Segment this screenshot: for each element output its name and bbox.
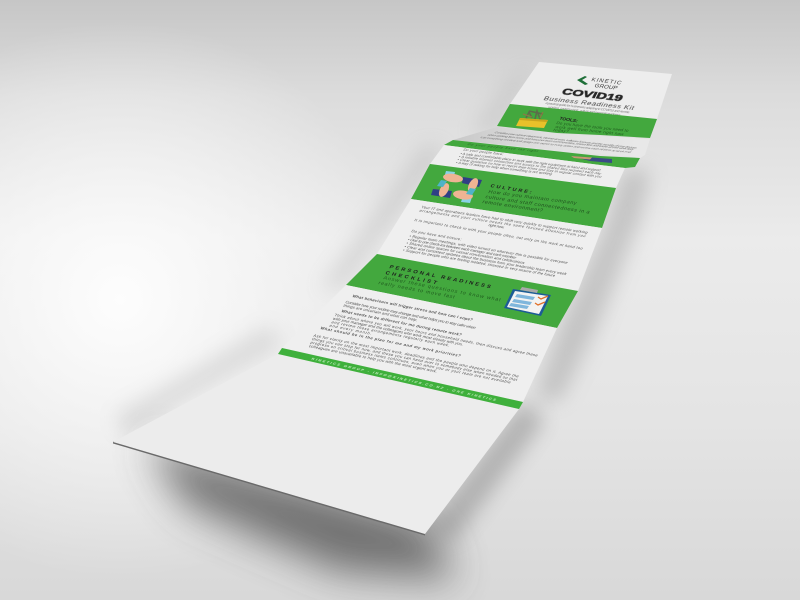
fold strip with text <box>453 127 650 158</box>
culture heading: CULTURE: <box>489 184 533 195</box>
fold strip green band: Do your people have the right <box>466 143 539 153</box>
checklist heading: PERSONAL READINESS <box>388 265 492 290</box>
body panel: culture guidance: • Clear and consistent updates about the business from your leadership team every week <box>404 244 568 276</box>
body panel: personal readiness questions: and review these arrangements regularly each week. <box>331 320 451 347</box>
culture text: How do you maintain company <box>487 190 578 206</box>
second panel: checklist: Do your people have: <box>462 148 505 156</box>
subtitle: Business Readiness Kit: Business Readiness Kit <box>542 94 636 112</box>
title: COVID19: COVID19 <box>560 87 625 104</box>
fold strip with text: Consider your current equipment, internet access, software licences and the security of your devices <box>493 131 638 149</box>
icon: toolbox <box>516 111 548 128</box>
culture text: culture and staff connectedness in a <box>484 195 591 215</box>
body panel: culture guidance: It is important to check in with your people often, not only on the work at hand too <box>414 218 584 250</box>
body panel: personal readiness questions: colleagues are unavailable to help you with the most urgent work. <box>308 344 438 373</box>
culture text: remote environment? <box>481 200 544 214</box>
body panel: personal readiness questions: things are uncertain and what can help. <box>343 303 419 322</box>
logo <box>577 76 623 92</box>
icon: clipboard <box>504 287 551 316</box>
body panel: culture guidance: right now. <box>487 223 506 229</box>
body panel: culture guidance: Your IT and operations leaders have had to shift very quickly to support remote working <box>420 205 589 235</box>
icon: ring of joined hands <box>431 171 482 203</box>
body panel: personal readiness questions: What needs to be different for me during remote work? <box>341 309 464 337</box>
fold strip with text: List everything needed and assign one owner to every action and review each of them at week end <box>479 136 632 154</box>
body panel: personal readiness questions: and every month. <box>329 323 373 336</box>
second panel: checklist: • Clear guidance on how to report their hours and stay in regular contact with you <box>456 158 603 179</box>
cover small print: working, covering tools, culture and personal readiness <box>548 105 622 117</box>
top panel: cover <box>510 62 672 119</box>
body panel: culture guidance <box>377 199 602 291</box>
body panel: personal readiness questions: with your manager and the colleagues who work most closely with you, <box>332 316 464 346</box>
body panel: personal readiness questions: What should be in the plan for me and my work priorities? <box>320 326 463 358</box>
body panel: personal readiness questions: Ask for clarity on the most important work, deadlines and the people who depend on it. Agree the <box>313 333 521 379</box>
second panel: checklist <box>430 145 625 188</box>
body panel: culture guidance: • Support for people who are feeling isolated, stressed or very unsure of the future <box>402 248 556 278</box>
logo: GROUP <box>593 84 619 92</box>
body panel: culture guidance: Do you have and ensure: <box>411 229 463 241</box>
green band: culture <box>411 164 616 228</box>
second panel: checklist: • A way of asking for help when something is not working <box>455 161 553 176</box>
cover small print: A practical guide for businesses adapting to COVID19 and remote <box>545 101 631 114</box>
checklist subtext: Answer these questions to know what <box>382 276 502 303</box>
paper drop shadow <box>115 66 650 580</box>
body panel: personal readiness questions: What behaviours will trigger stress and how can I cope? <box>352 294 475 322</box>
body panel: personal readiness questions: Consider how your routine may change and what helps you to stay calm when <box>345 300 477 330</box>
green footer band <box>278 348 523 409</box>
second panel: checklist: • A safe and comfortable place to work with the right equipment at hand and support <box>459 152 602 172</box>
footer text: KINETICS GROUP · INFO@KINETICS.CO.NZ · ONE KINETICS <box>310 357 497 402</box>
green band: personal readiness checklist <box>346 254 578 328</box>
green band: tools <box>497 104 657 138</box>
checklist subtext: really needs to move fast <box>377 281 456 300</box>
body panel: culture guidance: • One to one check-ins between each manager and each member <box>407 237 518 260</box>
body panel: personal readiness questions: things you can stop for now, and those you can hand over to somebody else when needed so that <box>311 337 519 382</box>
body panel: culture guidance: arrangements and your culture needs the same focused attention from you <box>418 208 587 238</box>
tools text: Do you have the tools you need to <box>556 121 630 133</box>
fold strip with text: when working from home and how your team communicates, shares files and tracks all their work daily <box>486 134 635 151</box>
body panel: culture guidance: • Shared online spaces for casual conversation and celebrations <box>406 241 526 265</box>
checklist heading: CHECKLIST <box>384 271 438 286</box>
body panel: personal readiness questions: Think about where you will work, your hours and household needs, then discuss and agree these <box>334 313 540 358</box>
logo: KINETIC <box>590 78 623 86</box>
body panel: personal readiness questions <box>282 285 557 402</box>
body panel: culture guidance: • Regular team meetings, with video turned on wherever this is possible for everyone <box>409 234 569 265</box>
tools text: work well from home right now <box>555 125 626 136</box>
tools text: today? <box>553 128 570 134</box>
body panel: personal readiness questions: progress on critical business items continues, even when you or your team are not available <box>310 340 513 384</box>
second panel: checklist: • A reliable internet connection and access to the shared files required each day <box>458 155 602 175</box>
tools heading: TOOLS: <box>558 116 579 124</box>
bottom blank flap <box>113 354 519 536</box>
fold strip green band <box>444 140 640 168</box>
